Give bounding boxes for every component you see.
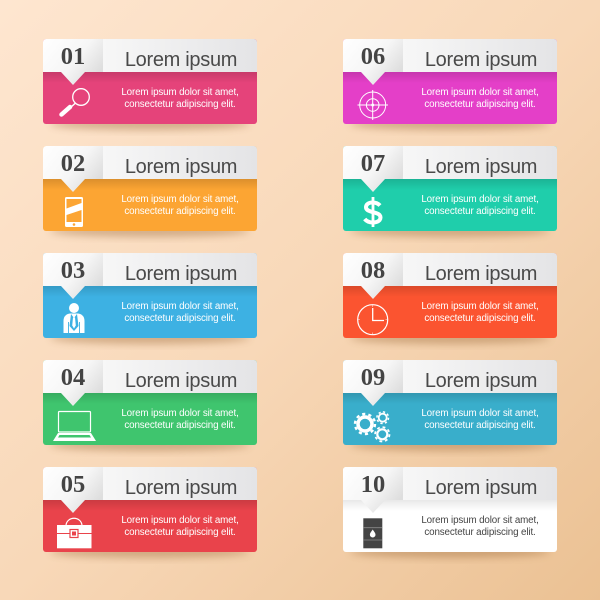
card 10: 10 xyxy=(361,471,385,498)
card 04: Lorem ipsum xyxy=(125,370,237,392)
card 01: 01 xyxy=(61,43,85,70)
card 04: 04 xyxy=(61,364,85,391)
card 07: 07 xyxy=(361,150,385,177)
card 08: Lorem ipsum dolor sit amet, xyxy=(421,301,539,312)
card 08 xyxy=(343,253,557,344)
card 09: consectetur adipiscing elit. xyxy=(424,420,536,431)
card 05: Lorem ipsum dolor sit amet, xyxy=(121,515,239,526)
card 08: Lorem ipsum xyxy=(425,263,537,285)
card 03: Lorem ipsum dolor sit amet, xyxy=(121,301,239,312)
card 07: Lorem ipsum xyxy=(425,156,537,178)
card 05: consectetur adipiscing elit. xyxy=(124,527,236,538)
card 05 xyxy=(43,467,257,558)
icon: magnifier xyxy=(62,89,89,114)
card 10: Lorem ipsum xyxy=(425,477,537,499)
icon: oil barrel xyxy=(363,518,382,548)
icon: businessman xyxy=(64,303,84,333)
icon: gears xyxy=(355,412,390,442)
icon: clock xyxy=(358,305,388,335)
card 06: Lorem ipsum dolor sit amet, xyxy=(421,87,539,98)
card 10: consectetur adipiscing elit. xyxy=(424,527,536,538)
card 04: Lorem ipsum dolor sit amet, xyxy=(121,408,239,419)
icon: briefcase xyxy=(57,518,92,548)
card 04: consectetur adipiscing elit. xyxy=(124,420,236,431)
card 06: 06 xyxy=(361,43,385,70)
card 01 xyxy=(43,39,257,130)
card 03 xyxy=(43,253,257,344)
card 07 xyxy=(343,146,557,237)
icon: laptop xyxy=(53,412,96,441)
card 03: consectetur adipiscing elit. xyxy=(124,313,236,324)
card 10: Lorem ipsum dolor sit amet, xyxy=(421,515,539,526)
card 01: consectetur adipiscing elit. xyxy=(124,99,236,110)
card 09: Lorem ipsum dolor sit amet, xyxy=(421,408,539,419)
card 02 xyxy=(43,146,257,237)
card 01: Lorem ipsum xyxy=(125,49,237,71)
card 06: Lorem ipsum xyxy=(425,49,537,71)
card 02: Lorem ipsum xyxy=(125,156,237,178)
card 05: Lorem ipsum xyxy=(125,477,237,499)
card 02: 02 xyxy=(61,150,85,177)
card 06 xyxy=(343,39,557,130)
icon: smartphone xyxy=(65,197,83,227)
card 08: 08 xyxy=(361,257,385,284)
icon: target xyxy=(358,90,388,120)
card 09 xyxy=(343,360,557,451)
card 05: 05 xyxy=(61,471,85,498)
card 08: consectetur adipiscing elit. xyxy=(424,313,536,324)
card 04 xyxy=(43,360,257,451)
card 03: Lorem ipsum xyxy=(125,263,237,285)
card 06: consectetur adipiscing elit. xyxy=(424,99,536,110)
card 01: Lorem ipsum dolor sit amet, xyxy=(121,87,239,98)
card 07: Lorem ipsum dolor sit amet, xyxy=(421,194,539,205)
card 09: 09 xyxy=(361,364,385,391)
icon: dollar sign xyxy=(365,197,380,227)
card 09: Lorem ipsum xyxy=(425,370,537,392)
card 03: 03 xyxy=(61,257,85,284)
card 07: consectetur adipiscing elit. xyxy=(424,206,536,217)
card 10 xyxy=(343,467,557,558)
card 02: Lorem ipsum dolor sit amet, xyxy=(121,194,239,205)
card 02: consectetur adipiscing elit. xyxy=(124,206,236,217)
